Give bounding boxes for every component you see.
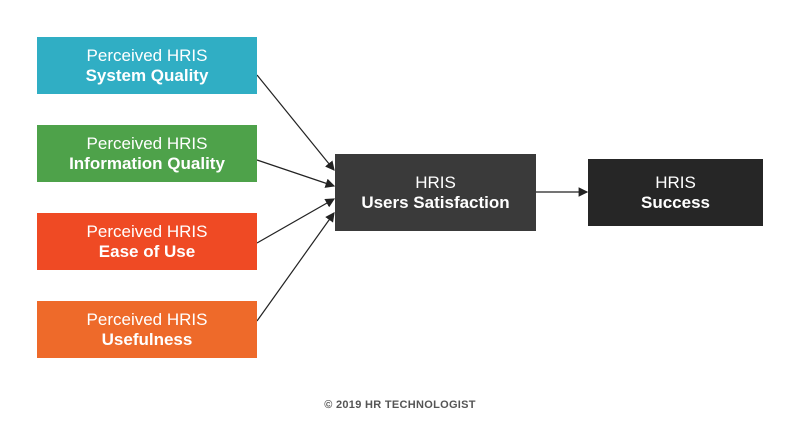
- box: system quality: Perceived HRIS: [87, 46, 207, 64]
- box: users satisfaction: [335, 154, 536, 231]
- box: information quality: [37, 125, 257, 182]
- box: users satisfaction: HRIS: [415, 172, 456, 192]
- box: system quality: [37, 37, 257, 94]
- box: information quality: Information Quality: [69, 154, 225, 172]
- box: usefulness: Perceived HRIS: [87, 310, 207, 328]
- box: success: [588, 159, 763, 226]
- box: users satisfaction: Users Satisfaction: [361, 192, 510, 212]
- box: success: Success: [641, 192, 710, 212]
- box: information quality: Perceived HRIS: [87, 134, 207, 152]
- box: usefulness: Usefulness: [102, 330, 192, 348]
- box: ease of use: Ease of Use: [99, 242, 195, 260]
- box: success: HRIS: [655, 172, 696, 192]
- box: ease of use: [37, 213, 257, 270]
- box: ease of use: Perceived HRIS: [87, 222, 207, 240]
- footer credit: © 2019 HR TECHNOLOGIST: [324, 399, 476, 411]
- box: usefulness: [37, 301, 257, 358]
- box: system quality: System Quality: [86, 66, 208, 84]
